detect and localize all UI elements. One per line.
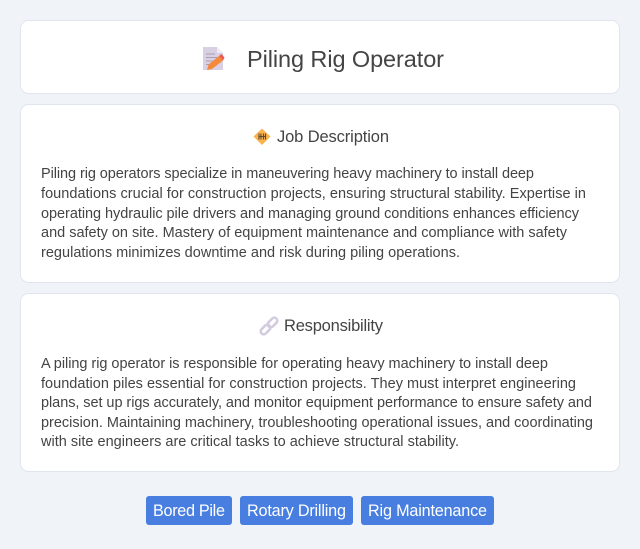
panel: job description xyxy=(20,104,620,282)
text block: responsibility: with site engineers are critical tasks to achieve structural stability. xyxy=(40,434,459,450)
icon: construction diamond xyxy=(254,128,270,145)
text block: responsibility xyxy=(40,356,593,450)
tag: bored pile: Bored Pile xyxy=(153,502,225,520)
panel: title header xyxy=(20,20,620,94)
tag: rig maintenance: Rig Maintenance xyxy=(368,502,487,520)
text block: responsibility: foundation piles essential for construction projects. They must interpret engineering xyxy=(41,376,576,392)
text block: job description: operating hydraulic pile drivers and managing ground conditions enhances efficiency xyxy=(41,206,580,222)
heading: responsibility: Responsibility xyxy=(284,317,384,335)
heading: job description: Job Description xyxy=(277,128,389,146)
panel: responsibility xyxy=(20,294,620,472)
icon: chain link xyxy=(259,316,279,336)
tag: bored pile xyxy=(146,496,232,525)
text block: responsibility: precision. Maintaining machinery, troubleshooting operational issues, and coordinating xyxy=(41,415,593,431)
text block: job description xyxy=(41,166,586,261)
tag: rotary drilling: Rotary Drilling xyxy=(247,502,346,520)
tag: rotary drilling xyxy=(240,496,353,525)
text block: job description: regulations minimizes downtime and risk during piling operations. xyxy=(41,245,460,261)
title: Piling Rig Operator xyxy=(247,46,444,72)
text block: job description: foundations crucial for construction projects, ensuring structural stability. Expertise in xyxy=(41,186,586,202)
text block: responsibility: plans, set up rigs accurately, and monitor equipment performance to ensure safety and xyxy=(41,395,592,411)
text block: job description: Piling rig operators specialize in maneuvering heavy machinery to install deep xyxy=(41,166,534,182)
tag row xyxy=(146,496,494,525)
text block: responsibility: A piling rig operator is responsible for operating heavy machinery to install deep xyxy=(41,356,548,372)
text block: job description: and safety on site. Mastery of equipment maintenance and compliance with safety xyxy=(41,225,568,241)
icon: memo with pencil xyxy=(203,47,224,70)
tag: rig maintenance xyxy=(361,496,494,525)
